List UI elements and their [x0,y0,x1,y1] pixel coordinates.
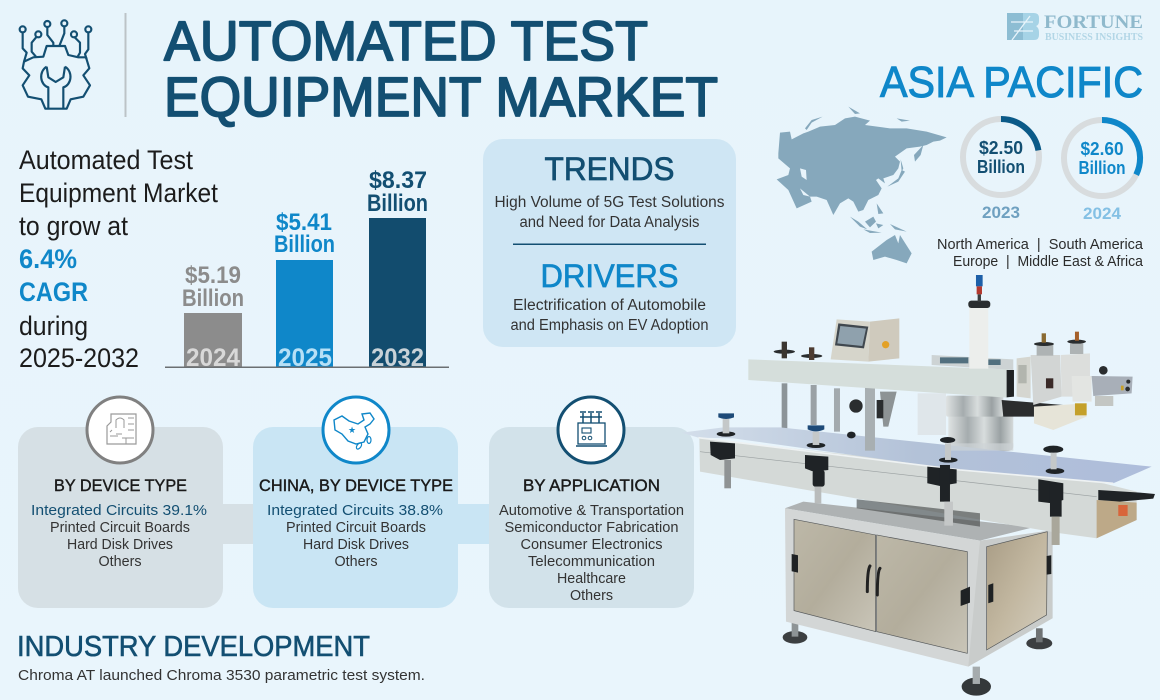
label strip behind beam [932,355,1013,370]
control panel [831,319,870,362]
donut: 2024: 2024 [1083,204,1122,223]
panel: China by device type: CHINA, BY DEVICE TYPE [259,477,453,495]
donut: 2023: 2023 [982,203,1020,222]
bar chart: Billion [367,190,428,217]
other regions text [937,236,1144,270]
panel: by application: Semiconductor Fabrication [504,519,678,536]
panel: by device type [18,397,223,608]
conveyor side [699,438,1137,538]
panel: by application: Healthcare [557,570,626,587]
panel: by application: Telecommunication [528,553,655,570]
text block: growth statement: Automated Test [19,145,193,175]
text block: growth statement: CAGR [19,277,88,307]
adjusters on beam [774,350,795,354]
panel: by application [489,397,694,608]
text block: growth statement: during [19,311,88,341]
text block: development detail: Chroma AT launched Chroma 3530 parametric test system. [18,667,425,684]
conveyor table top [682,427,1152,483]
panel: by device type: Others [98,553,142,570]
panel: trends and drivers: High Volume of 5G Test Solutions [494,194,725,211]
panel: trends and drivers: TRENDS [544,151,674,187]
icon: circuit gear and wrench [20,20,91,109]
logo: Fortune Business Insights: BUSINESS INSIGHTS [1045,32,1143,43]
bar chart: $5.19 [185,262,241,289]
panel: by application: Others [570,587,613,604]
heading: industry development: INDUSTRY DEVELOPMENT [17,631,370,663]
panel: China by device type [253,397,458,608]
panel: trends and drivers: and Need for Data Analysis [520,214,700,231]
text block: growth statement [19,145,218,373]
donut: 2024: Billion [1078,157,1126,178]
donut: 2024 [1064,120,1140,223]
donut: 2023: $2.50 [979,137,1023,158]
upper beam [748,359,1008,398]
icon: China map [323,397,389,463]
title: EQUIPMENT MARKET [164,65,718,128]
right label head [1002,400,1063,417]
panel: by device type: Hard Disk Drives [67,536,173,553]
text block: growth statement: Equipment Market [19,178,218,208]
support posts [782,383,787,432]
logo: Fortune Business Insights: FORTUNE [1044,12,1143,33]
text block: growth statement: 2025-2032 [19,343,139,373]
panel: trends and drivers [483,139,736,347]
drum [918,393,946,435]
heading: Asia Pacific: ASIA PACIFIC [880,58,1143,107]
map: Asia Pacific [777,107,947,263]
icon: China map: ★ [348,425,356,435]
bar chart: 2024 [186,344,240,372]
panel: by application: Consumer Electronics [520,536,662,553]
conveyor clamps and knobs [710,431,1155,517]
bar chart: $5.41 [276,209,332,236]
panel: trends and drivers: and Emphasis on EV Adoption [510,317,708,334]
title: AUTOMATED TEST [164,9,648,72]
bar chart: $8.37 [369,167,427,194]
panel: China by device type: Printed Circuit Boards [286,519,426,536]
panel: by application: Automotive & Transportation [499,502,684,519]
panel: China by device type: Integrated Circuits 38.8% [267,502,443,519]
bar chart [165,167,449,372]
bar chart: 2025 [278,344,332,372]
icon: test instrument [558,397,624,463]
panel: by device type: Integrated Circuits 39.1% [31,502,207,519]
text block: growth statement: to grow at [19,211,128,241]
bar chart: 2032 [371,344,424,372]
icon: circuit board [87,397,153,463]
panel: trends and drivers: Electrification of Automobile [513,297,706,314]
donut: 2024: $2.60 [1080,138,1124,159]
panel: by application: BY APPLICATION [523,477,660,495]
panel: by device type: Printed Circuit Boards [50,519,190,536]
panel: China by device type: Hard Disk Drives [303,536,409,553]
other regions text: Europe | Middle East & Africa [953,253,1144,270]
panel: by device type: BY DEVICE TYPE [54,477,187,495]
text block: growth statement: 6.4% [19,244,77,274]
feet [783,631,807,644]
panel: trends and drivers: DRIVERS [540,258,678,294]
bar chart: Billion [182,285,244,312]
donut: 2023: Billion [977,156,1025,177]
logo: Fortune Business Insights [1007,12,1143,43]
cabinet [785,502,1033,541]
column [969,307,988,369]
donut: 2023 [963,119,1039,222]
panel: China by device type: Others [334,553,378,570]
bar chart: Billion [274,231,335,258]
other regions text: North America | South America [937,236,1144,253]
machine illustration [682,275,1155,696]
title [164,9,718,128]
